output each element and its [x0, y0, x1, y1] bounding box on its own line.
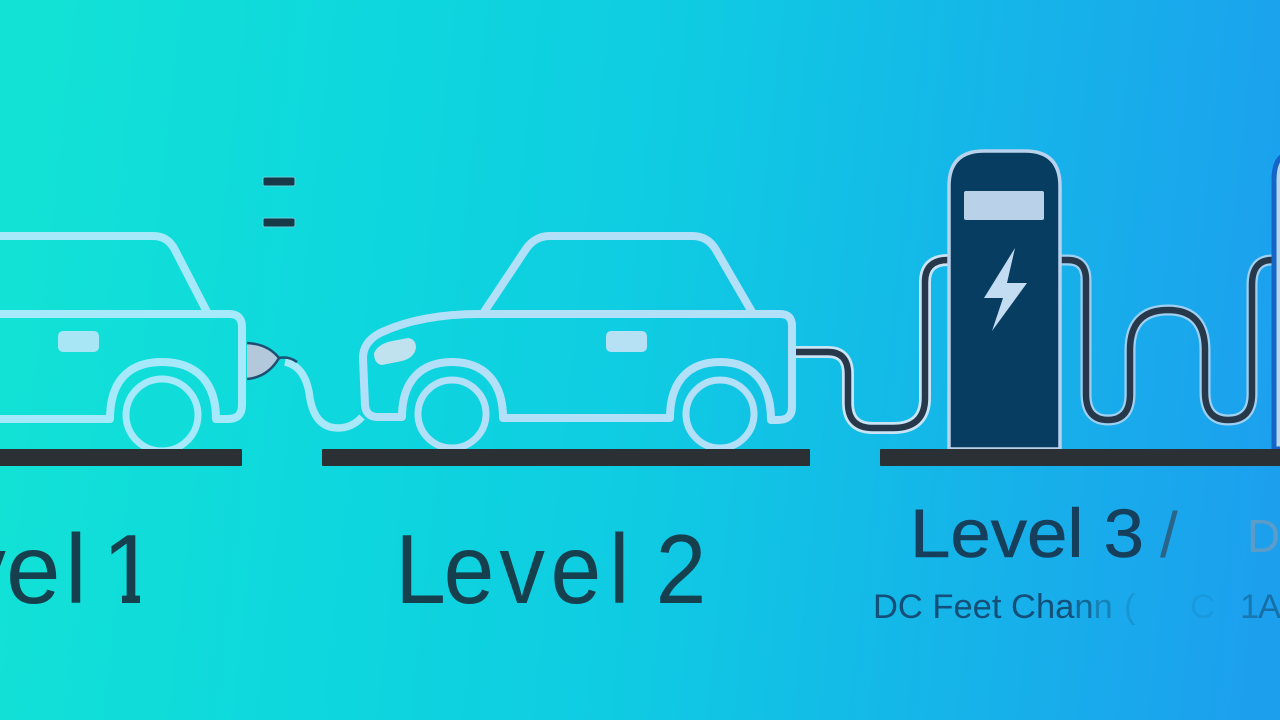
cable: charger to next unit: [1060, 260, 1272, 420]
ground bar: level 1: [0, 449, 242, 466]
car: level 2: [363, 236, 792, 448]
cable: level 2 to charger: [795, 260, 948, 428]
ground bar: level 3: [880, 449, 1280, 466]
car 2 headlight: [374, 338, 416, 365]
car 2 roof: [484, 236, 752, 312]
label: level 2: Level 2: [395, 515, 706, 625]
car 2 rear wheel: [686, 380, 754, 448]
label: slash: /: [1160, 499, 1178, 571]
label: level 1: [0, 532, 140, 604]
label: level 3: Level 3: [910, 495, 1144, 572]
car 2 door handle: [606, 331, 647, 352]
car: level 1: [0, 236, 242, 451]
charging station: [949, 151, 1060, 449]
label: level 1: 1: [102, 514, 157, 624]
car 2 front wheel: [418, 380, 486, 448]
next charging station, cropped: [1274, 155, 1280, 449]
icon: plug: [247, 343, 297, 379]
label: DC fast charging subtitle: DC Feet Chann: [873, 588, 1113, 626]
ground bar: level 2: [322, 449, 810, 466]
label: faded letter D: D: [1247, 510, 1280, 562]
car 1 body: [0, 314, 242, 419]
car 1 roof: [0, 236, 207, 312]
car 1 wheel: [126, 379, 198, 451]
label: DC fast charging subtitle: C: [1190, 588, 1215, 626]
dash marks: [263, 177, 295, 227]
charger screen: [964, 191, 1044, 220]
cable: level 1 to level 2: [285, 362, 362, 428]
car 1 door handle: [58, 331, 99, 352]
label: DC fast charging subtitle: (: [1124, 588, 1136, 626]
car 2 body: [363, 314, 792, 420]
label: DC fast charging subtitle: 1: [1240, 588, 1259, 626]
icon: lightning bolt: [984, 248, 1027, 331]
